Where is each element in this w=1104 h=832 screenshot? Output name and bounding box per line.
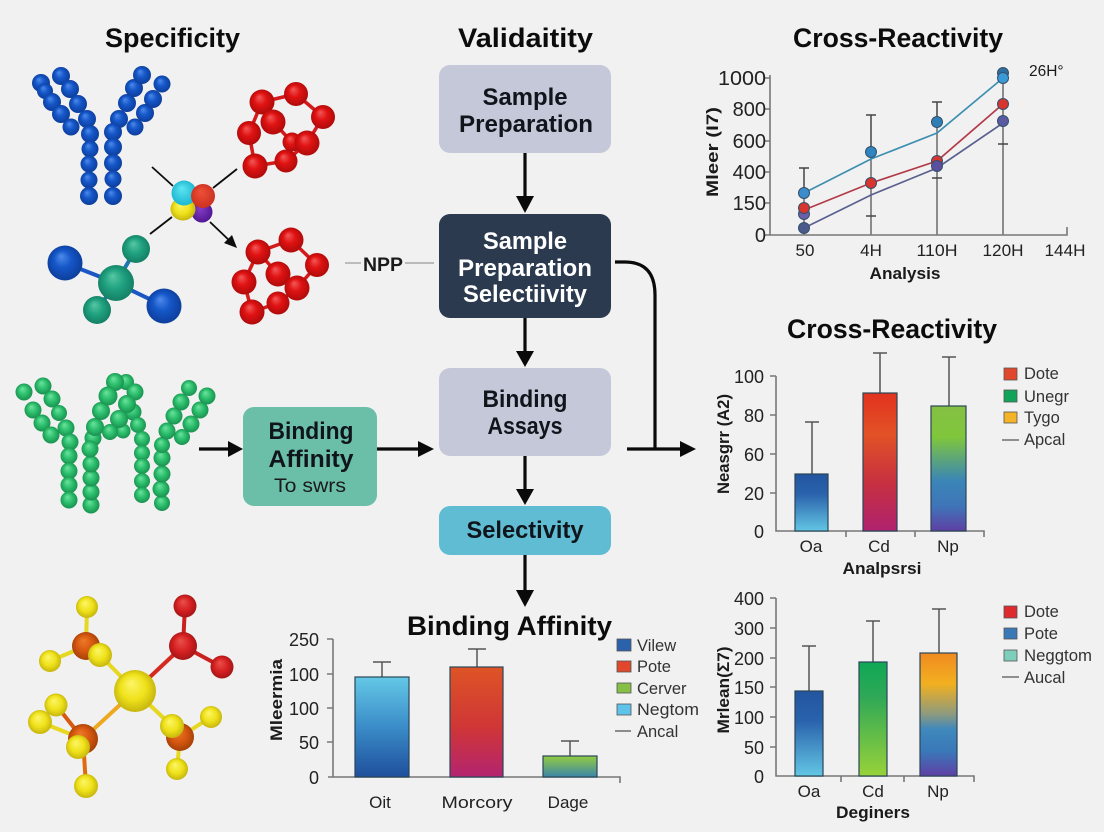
y axis labels: 0 [755,225,766,247]
x axis labels: Np [927,782,949,801]
bar: Np [931,406,966,531]
chart: bar chart Mrlean [714,589,1092,822]
bar: Np [920,653,957,776]
box: Sample Preparation Selectivity: Selectiivity [463,281,588,308]
y axis labels: 100 [289,699,319,719]
chart: bar chart Mleermia [267,630,699,812]
legend [1002,603,1092,687]
arrow: sample preparation to dark box [516,153,534,213]
y axis labels: 300 [734,619,764,639]
y axis labels: 80 [744,406,764,426]
icon: blue antibody [32,66,170,205]
legend: Negtom [637,701,699,719]
y axis labels: 800 [733,99,766,121]
legend: Aucal [1024,669,1065,687]
box: Selectivity: Selectivity [466,517,584,544]
y axis labels: 50 [299,733,319,753]
y axis labels: 400 [734,589,764,609]
y axis labels: 60 [744,445,764,465]
y axis labels: 100 [289,665,319,685]
y axis title: Mleermia [267,658,286,741]
title: Validaitity: Validaitity [458,23,593,53]
box: Binding Assays: Binding [482,386,568,413]
y axis labels [734,367,764,542]
x axis labels: Cd [862,782,884,801]
box: Binding Affinity To swrs: Affinity [268,446,354,473]
arrow: binding affinity box to binding assays [377,441,434,457]
box: Binding Affinity To swrs [243,407,377,506]
legend: Dote [1024,603,1059,621]
x axis labels: Oit [369,793,391,812]
legend: Dote [1024,365,1059,383]
title: Cross-Reactivity top: Cross-Reactivity [793,23,1003,53]
box: Sample Preparation: Sample [482,84,568,111]
box: Binding Affinity To swrs: To swrs [274,476,346,497]
icon: green double antibody [16,373,216,514]
y axis title: Mrlean(Σ7) [714,647,733,733]
y axis labels: 20 [744,484,764,504]
x axis labels: 110H [916,241,958,260]
x axis title: Analpsrsi [842,559,922,578]
legend: Cerver [637,680,687,698]
series markers [798,68,1008,234]
x axis labels: Oa [798,782,821,801]
legend: Pote [1024,625,1058,643]
error bars [799,78,1008,235]
box: Binding Assays [439,368,611,456]
y axis labels: 0 [754,767,764,787]
icon: yellow and red molecule [28,594,234,798]
x axis labels: Dage [548,793,588,812]
x axis labels: 4H [860,241,882,260]
box: Sample Preparation Selectivity: Preparation [458,255,592,282]
legend [1002,365,1069,449]
box: Binding Affinity To swrs: Binding [268,418,354,445]
y axis labels: 1000 [718,68,766,90]
y axis labels [289,630,319,788]
chart: line chart Cross-Reactivity [703,63,1086,283]
x axis labels [369,793,588,812]
box: Sample Preparation [439,65,611,153]
y axis labels: 250 [289,630,319,650]
bar: Morcory [450,667,503,777]
arrow: binding assays to selectivity [516,456,534,505]
box: Selectivity [439,506,611,555]
x axis labels: Oa [800,537,823,556]
x axis labels: 144H [1044,241,1086,260]
y axis labels: 150 [734,678,764,698]
y axis title: Mleer (I7) [703,107,722,197]
label: NPP with leader lines [345,255,434,276]
legend [615,637,699,741]
y axis labels [734,589,764,787]
x axis labels: Cd [868,537,890,556]
legend: Tygo [1024,409,1060,427]
title: Specificity: Specificity [105,23,240,53]
bar: Cd [859,662,887,776]
icon: red ring molecule bottom [232,228,329,324]
x axis labels: 120H [982,241,1024,260]
icon: red ring molecule top [237,82,335,178]
arrow: selectivity to binding affinity [516,555,534,607]
legend: Pote [637,658,671,676]
title: Binding Affinity: Binding Affinity [407,611,612,641]
error bars [373,649,579,756]
chart: bar chart Neasgrr [714,353,1069,578]
y axis labels: 0 [309,768,319,788]
bar: Dage [543,756,597,777]
y axis labels: 100 [734,708,764,728]
series lines [804,78,1003,228]
arrow: antibody to binding affinity box [199,441,243,457]
bar: Oa [795,474,828,531]
y axis labels: 400 [733,162,766,184]
legend: Apcal [1024,431,1065,449]
error bars [802,609,946,691]
legend: Vilew [637,637,676,655]
arrow: branch to right-hand charts [615,262,696,457]
x axis labels [800,537,959,556]
x axis labels: Morcory [442,793,513,812]
legend: Neggtom [1024,647,1092,665]
icon: multicolour binding cluster with connecting lines [150,167,237,248]
icon: blue and teal molecule [48,235,182,324]
label: NPP with leader lines: NPP [363,255,403,276]
y axis labels: 150 [733,193,766,215]
series note: 26H° [1029,63,1064,80]
y axis title: Neasgrr (A2) [714,394,733,494]
x axis labels: Np [937,537,959,556]
x axis title: Analysis [870,264,940,283]
x axis labels: 50 [796,241,814,260]
y axis labels: 50 [744,738,764,758]
box: Binding Assays: Assays [488,413,562,440]
legend: Ancal [637,723,678,741]
box: Sample Preparation: Preparation [459,111,593,138]
error bars [805,353,956,474]
y axis labels: 200 [734,649,764,669]
y axis labels [718,68,766,247]
arrow: dark box to binding assays [516,318,534,367]
x axis labels [798,782,949,801]
box: Sample Preparation Selectivity: Sample [483,228,567,255]
x axis title: Deginers [836,803,910,822]
y axis labels: 0 [754,522,764,542]
title: Cross-Reactivity middle: Cross-Reactivity [787,314,997,344]
bar: Oa [795,691,823,776]
box: Sample Preparation Selectivity [439,214,611,318]
y axis labels: 100 [734,367,764,387]
bar: Oit [355,677,409,777]
legend: Unegr [1024,388,1069,406]
x axis labels [796,241,1086,260]
y axis labels: 600 [733,131,766,153]
bar: Cd [863,393,897,531]
